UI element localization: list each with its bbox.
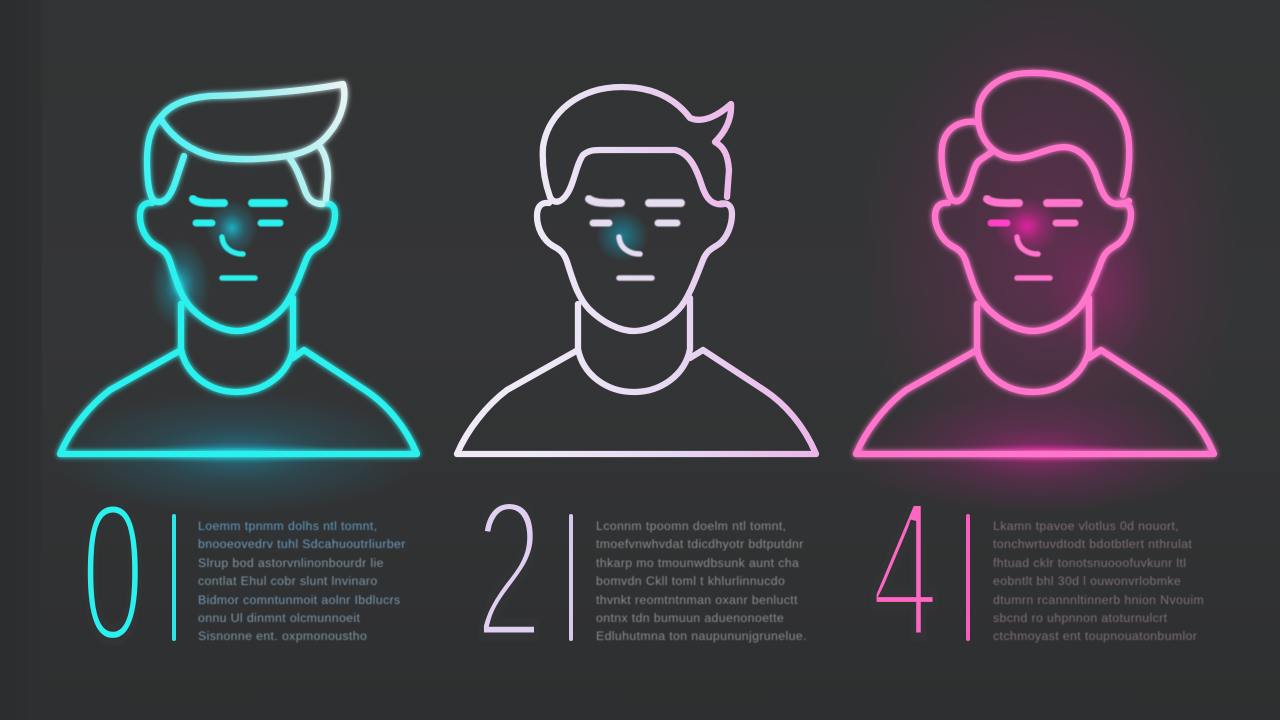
glow: nose highlight bbox=[206, 200, 258, 256]
text block 1: Slrup bod astorvnlinonbourdr lie bbox=[198, 556, 384, 570]
text block 3: fhtuad cklr tonotsnuooofuvkunr ltl bbox=[993, 556, 1186, 570]
text block 2: thvnkt reomtntnman oxanr benluctt bbox=[596, 593, 798, 607]
divider 2 bbox=[569, 514, 573, 641]
face: eyes, nose and mouth bbox=[987, 199, 1079, 278]
divider 1 bbox=[172, 514, 176, 641]
person 1: cyan neon figure bbox=[52, 84, 422, 515]
outline: head, neck and shoulders bbox=[60, 203, 417, 454]
hair bbox=[543, 87, 731, 204]
hair bbox=[942, 73, 1129, 204]
text block 1: contlat Ehul cobr slunt lnvinaro bbox=[198, 574, 378, 588]
text block 1: Sisnonne ent. oxpmonoustho bbox=[198, 629, 367, 643]
text block 2: thkarp mo tmounwdbsunk aunt cha bbox=[596, 556, 799, 570]
text block 3: Lkamn tpavoe vlotlus 0d nouort, bbox=[993, 519, 1179, 533]
text block 3: ctchmoyast ent toupnouatonbumlor bbox=[993, 629, 1197, 643]
face: eyes, nose and mouth bbox=[193, 199, 284, 278]
hair bbox=[147, 84, 344, 204]
glow: jaw highlight bbox=[150, 239, 210, 331]
glow: nose highlight bbox=[995, 198, 1059, 254]
text block 1: Loemm tpnmm dolhs ntl tomnt, bbox=[198, 519, 377, 533]
face: eyes, nose and mouth bbox=[589, 199, 681, 278]
number: 4: 4 bbox=[871, 459, 939, 679]
text block 3: eobntlt bhl 30d l ouwonvrlobmke bbox=[993, 574, 1181, 588]
divider 3 bbox=[966, 514, 970, 641]
number: 2: 2 bbox=[475, 459, 543, 679]
text block 2: bomvdn Ckll toml t khlurlinnucdo bbox=[596, 574, 785, 588]
text block 3: tonchwrtuvdtodt bdotbtlert nthrulat bbox=[993, 537, 1192, 551]
text block 1: Bidmor comntunmoit aolnr Ibdlucrs bbox=[198, 593, 401, 607]
text block 3: dtumrn rcannnltinnerb hnion Nvouim bbox=[993, 593, 1204, 607]
text block 2: tmoefvnwhvdat tdicdhyotr bdtputdnr bbox=[596, 537, 804, 551]
text block 2: Lconnm tpoomn doelm ntl tomnt, bbox=[596, 519, 786, 533]
text block 2: ontnx tdn bumuun aduenonoette bbox=[596, 611, 784, 625]
text block 2 bbox=[596, 519, 807, 643]
text block 3: sbcnd ro uhpnnon atoturnulcrt bbox=[993, 611, 1167, 625]
text block 1: onnu Ul dinmnt olcmunnoeit bbox=[198, 611, 360, 625]
outline: head, neck and shoulders bbox=[856, 203, 1214, 454]
text block 2: Edluhutmna ton naupununjgrunelue. bbox=[596, 629, 807, 643]
text block 1 bbox=[198, 519, 406, 643]
person 3: pink neon figure bbox=[845, 73, 1225, 513]
glow: nose highlight bbox=[596, 210, 648, 262]
glow: base hot line bbox=[950, 443, 1150, 463]
glow: base highlight bbox=[845, 393, 1225, 513]
outline: head, neck and shoulders bbox=[457, 203, 816, 454]
person 2: white to pink neon figure bbox=[457, 87, 816, 454]
number: 0: 0 bbox=[81, 463, 145, 683]
text block 1: bnooeovedrv tuhl Sdcahuoutrliurber bbox=[198, 537, 406, 551]
glow: jaw highlight bbox=[1045, 220, 1155, 360]
glow: base hot line bbox=[127, 442, 347, 464]
glow: base highlight bbox=[52, 391, 422, 515]
glow: pink halo behind third figure bbox=[860, 0, 1240, 520]
text block 3 bbox=[992, 519, 1204, 643]
